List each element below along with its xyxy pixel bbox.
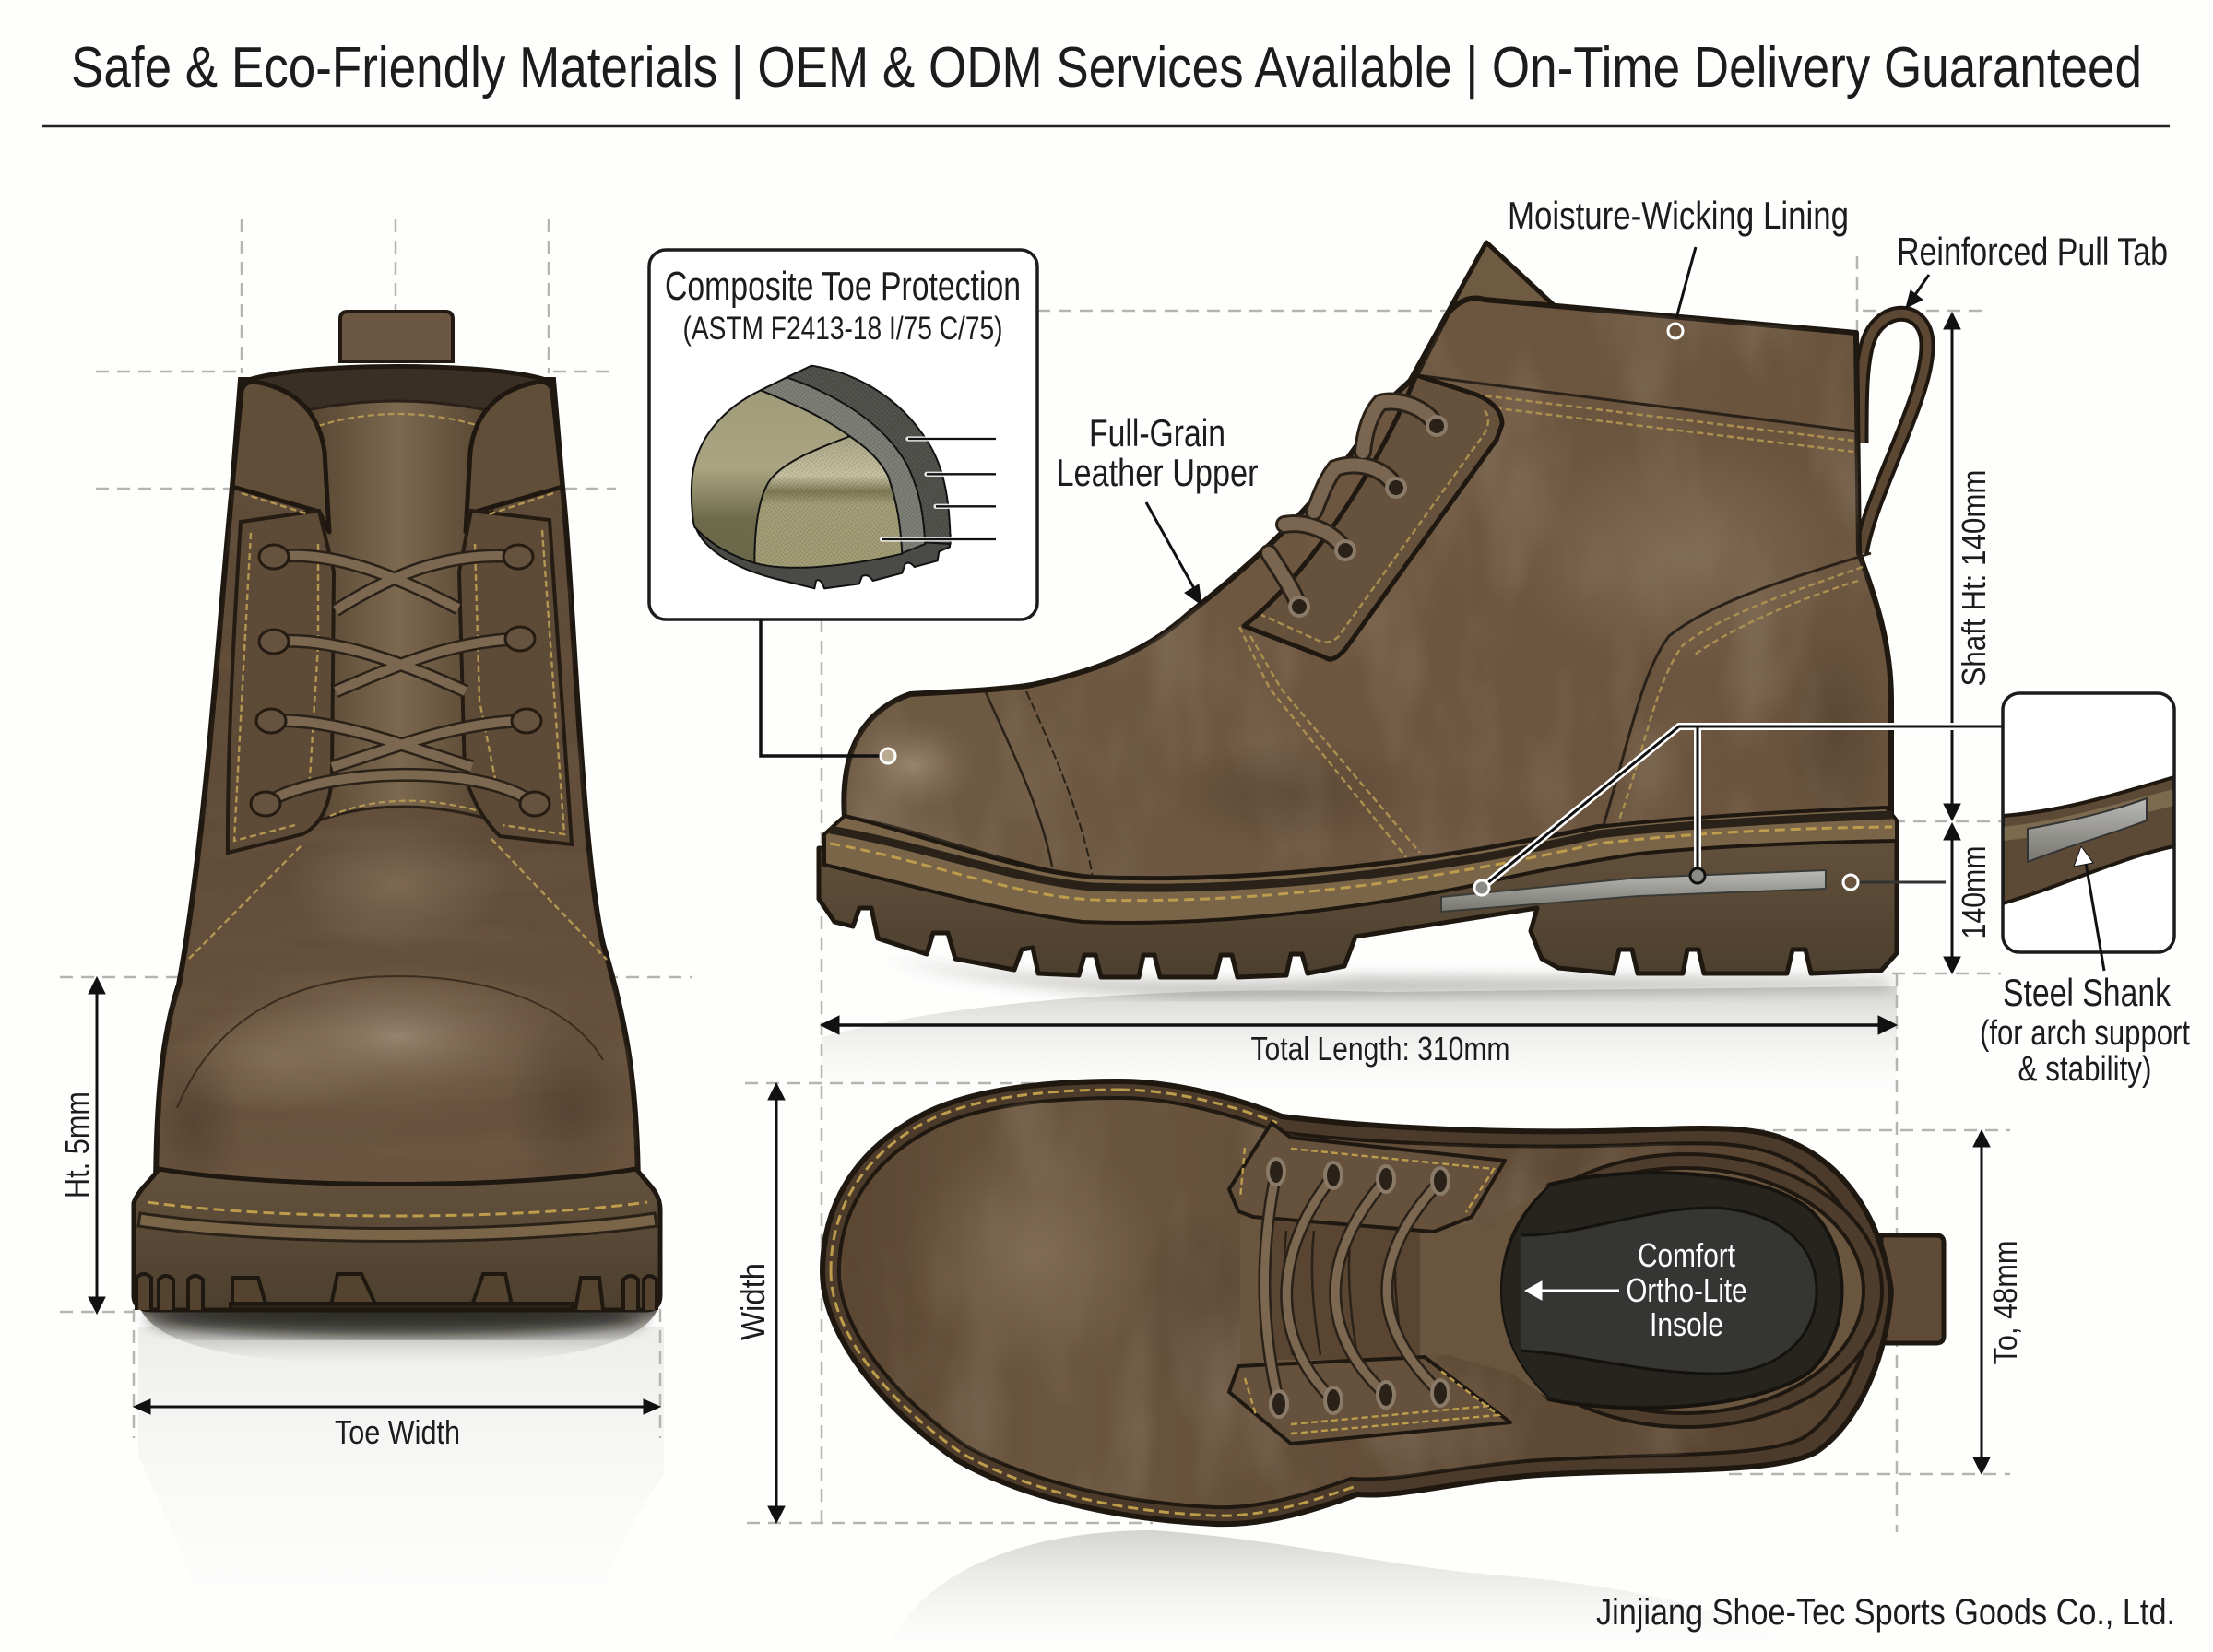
lacing gap shading [1263,1221,1420,1360]
collar ring inner [1504,1168,1864,1413]
arrow: insole [1525,1281,1619,1300]
leather mottling, top [839,1101,1684,1501]
upper leather, side [844,299,1891,879]
welt stitching, side [830,827,1892,901]
label: steel shank [1980,971,2190,1089]
lace panel stitching, top [1240,1148,1498,1434]
contact shadow under side boot [885,959,1890,997]
leather mottling, front [157,494,636,1167]
insole [1521,1208,1817,1374]
tongue stitching [318,414,479,816]
laces, side [1269,402,1437,607]
insole label: Insole [1650,1305,1723,1343]
laces, top [1264,1172,1440,1404]
collar ring [1491,1154,1882,1427]
top view boot [822,1081,1944,1524]
shadow under front boot [138,1300,659,1364]
label: full-grain leather upper: Leather Upper [1057,451,1259,494]
arrow: pull tab [1906,275,1929,308]
welt, side [824,808,1897,923]
collar stitching [1475,395,1853,452]
arrow: leather upper [1146,502,1201,605]
title rule [42,125,2170,127]
label: sole height: 140mm [1955,846,1993,938]
panel stitching [189,493,607,960]
floor reflections [138,986,1897,1652]
eyelets, top [1268,1159,1449,1417]
lace panel, side [1244,375,1502,659]
arrow: height dimension [89,977,105,1314]
welt stitching, front [148,1202,647,1216]
rim stitching [831,1090,1354,1516]
label: full-grain leather upper [1057,411,1259,494]
label: to 48mm: To, 48mm [1986,1241,2024,1364]
collar seam, side [1416,375,1856,431]
lace panel stitching [1261,410,1488,643]
label: full-grain leather upper: Full-Grain [1089,411,1225,454]
sole, front [134,1169,660,1310]
label: shaft height: Shaft Ht: 140mm [1955,470,1993,686]
label: Ht. 5mm: Ht. 5mm [58,1092,96,1198]
label: total length: Total Length: 310mm [1250,1030,1510,1068]
leader: toe cap to callout [761,620,895,763]
collar flaps [232,382,562,532]
label: width: Width [734,1263,772,1340]
boot mouth [243,367,550,452]
insole label: Ortho-Lite [1627,1271,1746,1309]
sole, side [819,830,1897,977]
leaders: steel shank [1474,726,2003,895]
side view boot [819,242,1927,977]
label: moisture-wicking lining: Moisture-Wicking Lining [1508,194,1849,237]
lugs, front [136,1274,657,1310]
steel shank inset [2003,693,2174,952]
arrow: total length [821,1016,1897,1034]
laces, front [266,556,535,804]
right eye panel [459,511,572,844]
heel counter [1604,553,1871,825]
welt upper edge [830,815,1892,888]
pull tab, front [340,312,453,361]
eyelets, front [251,545,550,816]
steel shank plate [1441,870,1826,912]
front view boot [134,312,660,1310]
callout: composite toe protection [649,250,1037,620]
insole label: Comfort [1638,1236,1735,1274]
left eye panel [228,511,334,853]
callout panel [649,250,1037,620]
arrow: shank inset [2074,846,2104,971]
vamp stitching [1239,627,1420,857]
tongue [302,401,494,820]
foot opening [1500,1173,1842,1408]
toe cap seams [986,692,1052,867]
label: steel shank: & stability) [2018,1050,2152,1089]
arrow: sole height [1944,823,1960,974]
pull tab loop [1861,313,1927,553]
eyelets, side [1290,417,1446,616]
label: steel shank: Steel Shank [2003,971,2172,1014]
upper lace panel [1229,1123,1505,1232]
callout heading: Composite Toe Protection [665,264,1021,309]
arrow: top depth [1973,1130,1990,1474]
dimension guide lines [60,219,2010,1532]
arrow: shaft height [1944,313,1960,820]
upper leather, front [156,380,638,1198]
toe cap seam [177,976,603,1108]
leader: sole dot [1843,875,1946,890]
lower lace panel [1229,1357,1510,1444]
tongue lace lines [1284,1231,1403,1355]
outsole rim [822,1081,1891,1524]
rear pull tab [1881,1235,1944,1343]
upper leather, top [839,1098,1875,1507]
label: Toe Width: Toe Width [335,1413,460,1451]
arrow: toe width [134,1399,660,1414]
toe cap cross-section [692,366,996,588]
welt band, front [138,1213,657,1241]
callout standard: (ASTM F2413-18 I/75 C/75) [682,311,1003,347]
leader: moisture-wicking lining [1668,247,1696,338]
arrow: width [768,1083,785,1523]
insole label [1627,1236,1746,1343]
tongue, side [1406,242,1553,387]
tongue, top [1240,1185,1549,1399]
leather mottling, side [830,295,1909,885]
